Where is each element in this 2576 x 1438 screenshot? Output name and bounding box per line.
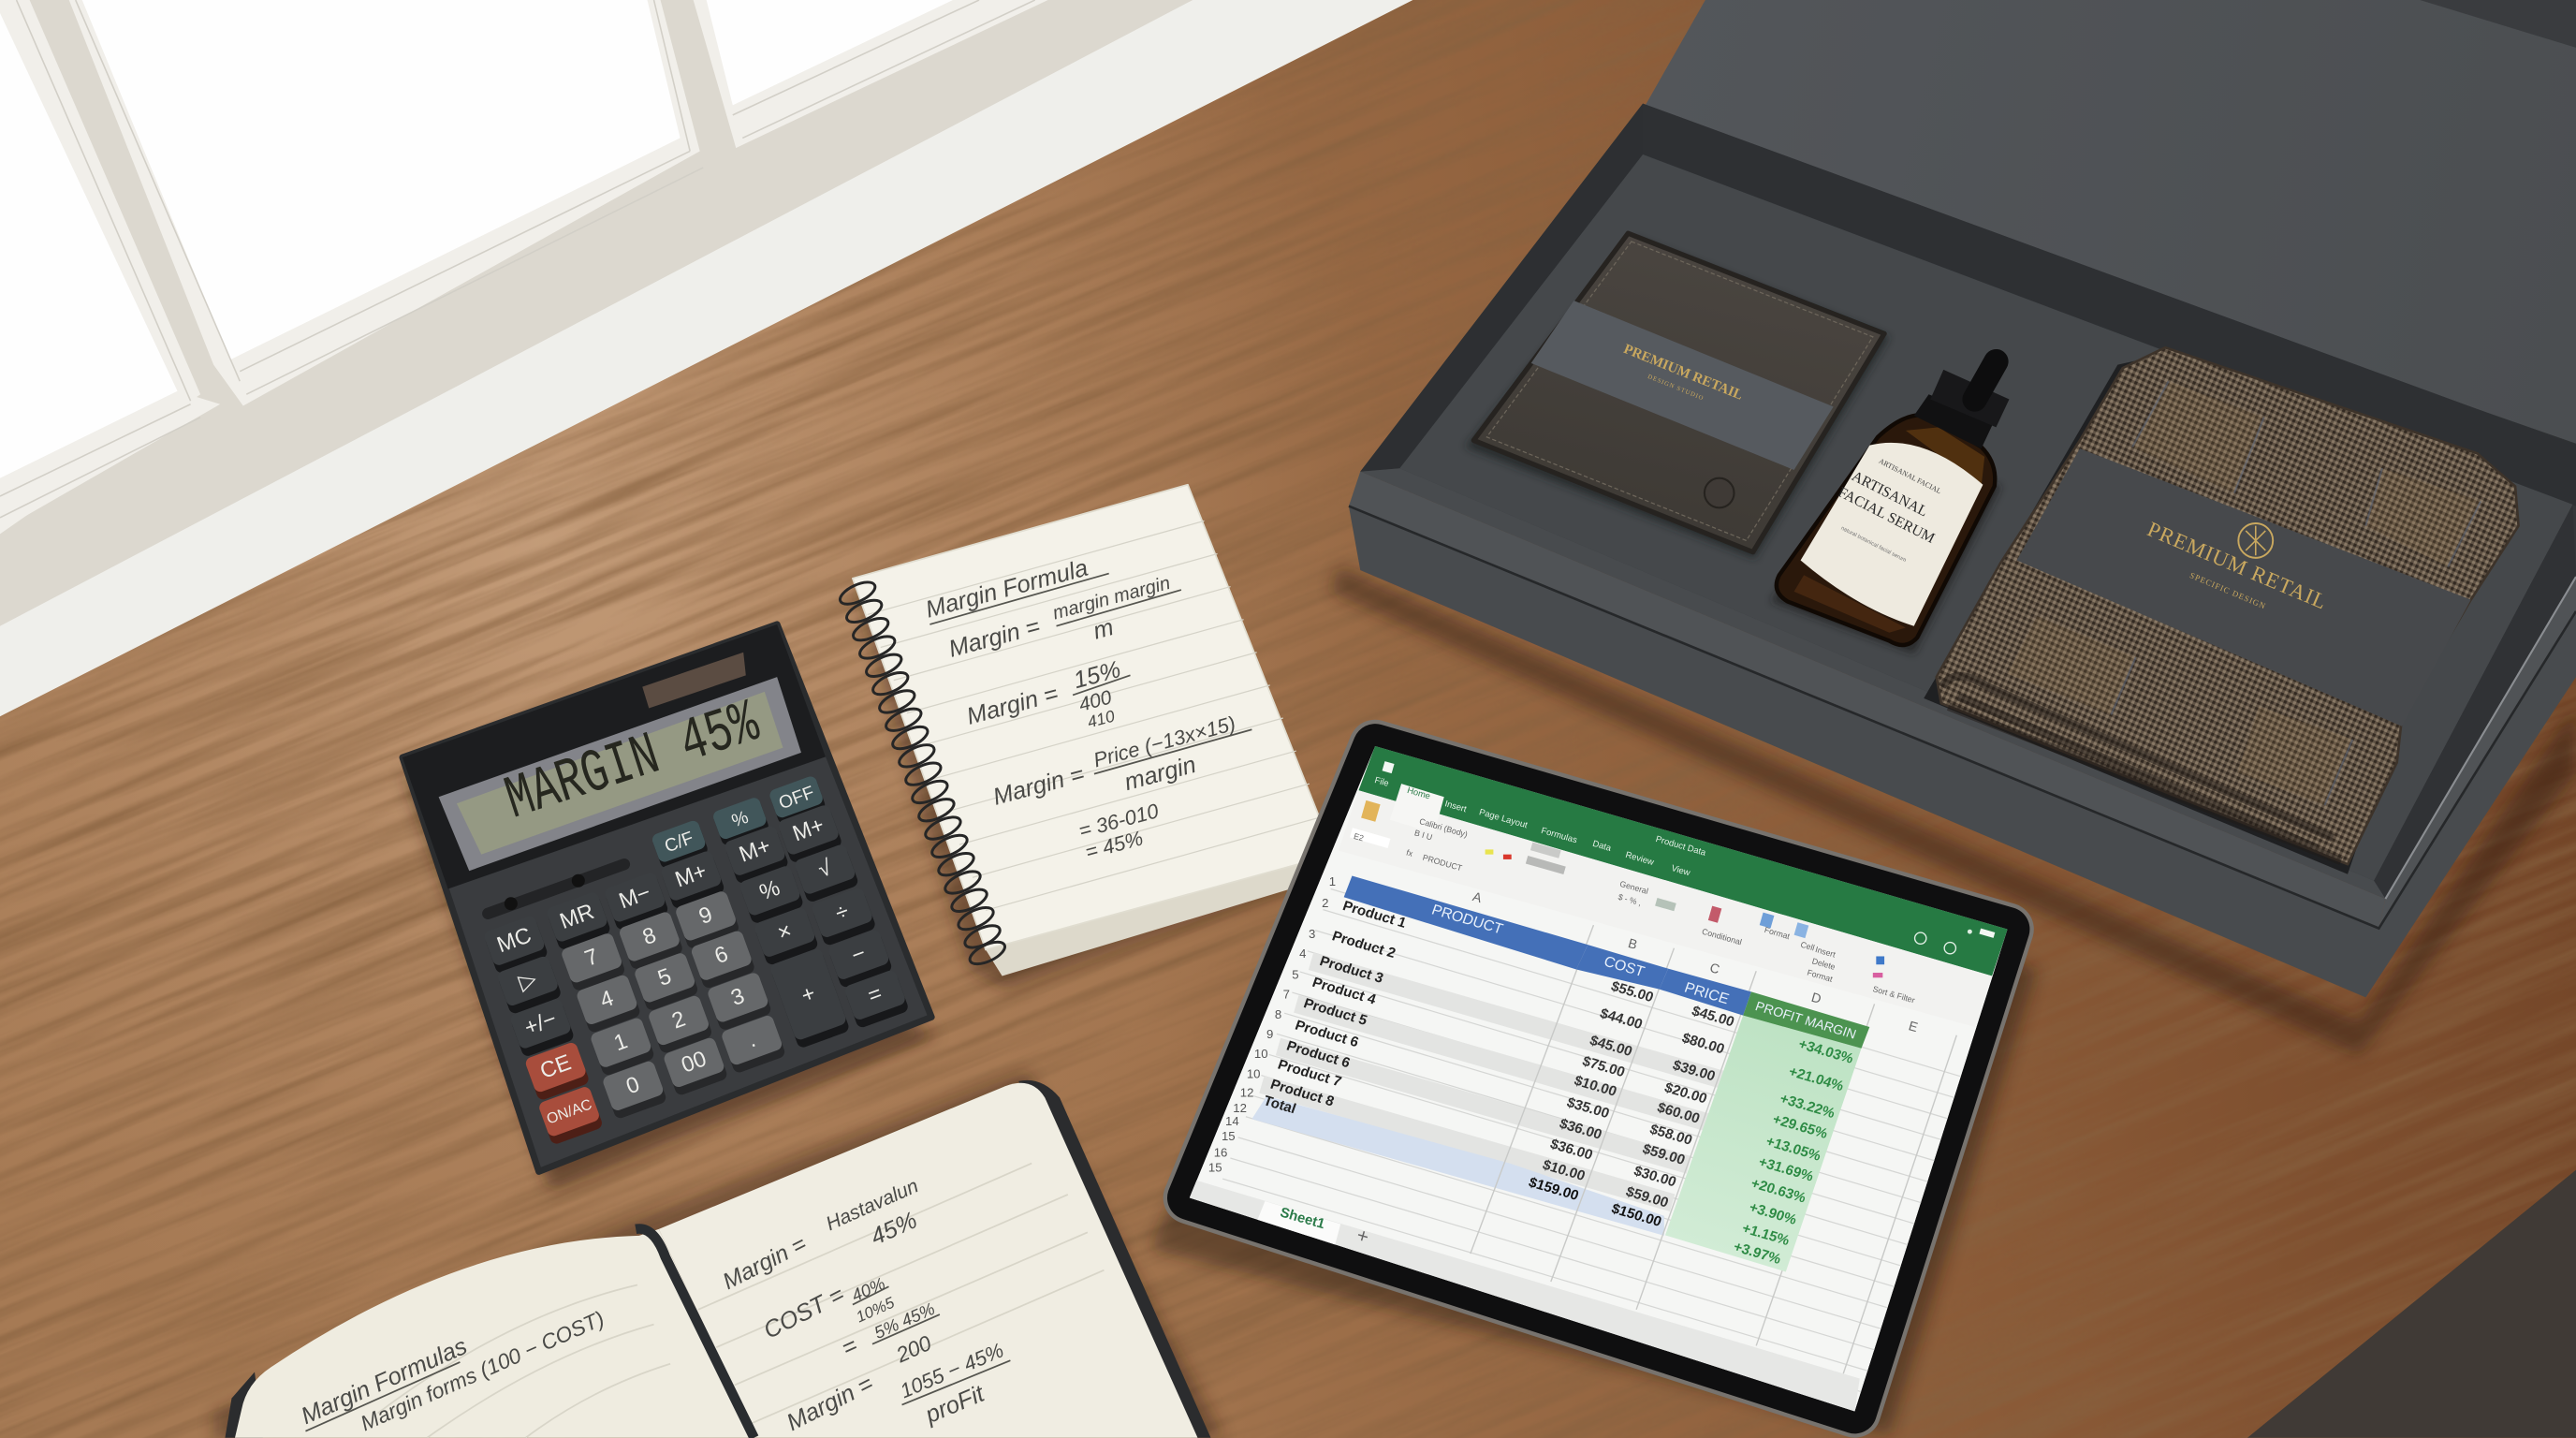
- left page handwriting: Margin Formulas: [298, 1333, 471, 1430]
- large pane: [82, 0, 681, 360]
- ribbon commands: Cell: [1799, 940, 1816, 953]
- window and sill: [0, 0, 1412, 716]
- key equals: [843, 969, 910, 1029]
- profit margin values: +34.03%: [1796, 1036, 1855, 1067]
- blue cost header: [1576, 945, 1668, 990]
- LCD screen: [457, 692, 783, 855]
- add sheet button: +: [1354, 1225, 1371, 1248]
- product names: Product 7: [1276, 1057, 1343, 1090]
- bottle body: [1777, 415, 1995, 645]
- handwritten formulas: Margin =: [946, 613, 1043, 663]
- spiral binding: [837, 578, 1008, 968]
- price values: $30.00: [1632, 1163, 1678, 1190]
- product names: Product 6: [1284, 1038, 1353, 1071]
- product names: Product 2: [1330, 929, 1398, 961]
- wallet stitching: [1486, 242, 1873, 540]
- right page handwriting: 10%5: [854, 1293, 898, 1326]
- price values: $39.00: [1671, 1057, 1718, 1084]
- key 6: 6: [711, 942, 731, 969]
- key percent top: %: [729, 808, 751, 831]
- back cover right edge: [1018, 1080, 1211, 1438]
- green margin header: [1743, 991, 1869, 1049]
- key ON/AC: [537, 1085, 604, 1146]
- key 0: 0: [623, 1072, 643, 1099]
- serum bottle: [1777, 361, 2009, 645]
- price values: $58.00: [1647, 1122, 1694, 1149]
- key decimal: [720, 1014, 786, 1074]
- handwritten formulas: = 45%: [1083, 826, 1146, 864]
- handwritten formulas: Margin =: [990, 761, 1087, 811]
- key plus-minus: [509, 997, 575, 1058]
- ribbon commands: Format: [1764, 925, 1792, 941]
- back cover left edge: [225, 1372, 263, 1438]
- key percent: %: [756, 876, 783, 905]
- key 9: 9: [695, 902, 716, 930]
- price values: $20.00: [1662, 1079, 1709, 1107]
- slider switches: [488, 864, 624, 914]
- calculator: [402, 624, 936, 1190]
- tablet casing: [1190, 746, 2008, 1412]
- ribbon commands: Sort & Filter: [1872, 984, 1916, 1005]
- ribbon commands: General: [1618, 879, 1649, 896]
- total row band: [1251, 1096, 1664, 1236]
- scarf paper band: [2017, 448, 2471, 726]
- right page handwriting: 200: [892, 1330, 935, 1368]
- tray outer faces: [1349, 468, 2576, 929]
- key minus: [827, 929, 893, 989]
- key 7: 7: [581, 945, 602, 972]
- header labels: PROFIT MARGIN: [1753, 998, 1858, 1042]
- cost values: $36.00: [1548, 1137, 1595, 1164]
- row numbers: 12: [1240, 1086, 1253, 1100]
- ribbon commands: Format: [1806, 968, 1834, 984]
- key 9: [674, 889, 740, 950]
- left page: [235, 1229, 757, 1438]
- band brand text: PREMIUM RETAIL: [2144, 517, 2331, 614]
- row numbers: 4: [1299, 946, 1306, 961]
- ribbon commands: $ - % ,: [1617, 892, 1643, 907]
- right page handwriting: [719, 1175, 1010, 1436]
- formula bar: PRODUCT: [1422, 853, 1464, 873]
- product names: [1262, 898, 1409, 1117]
- sheet tab label: Sheet1: [1279, 1205, 1326, 1232]
- ribbon commands: [1361, 800, 1916, 1005]
- row numbers: 8: [1275, 1007, 1281, 1021]
- key M+ a: M+: [790, 813, 827, 846]
- profit margin values: +1.15%: [1740, 1221, 1792, 1249]
- column letters: B: [1627, 935, 1639, 952]
- header labels: COST: [1602, 954, 1647, 980]
- floor beyond table: [2247, 1170, 2576, 1438]
- row numbers: 12: [1233, 1101, 1247, 1115]
- key MC: [483, 915, 549, 975]
- cost values: $10.00: [1541, 1157, 1588, 1184]
- ribbon panel: [1359, 790, 1992, 976]
- key 4: [576, 974, 641, 1034]
- product names: Product 3: [1318, 953, 1385, 987]
- handwritten formulas: m: [1090, 614, 1117, 645]
- wallet band small text: DESIGN STUDIO: [1647, 374, 1705, 403]
- gift box: [1331, 0, 2576, 1055]
- ribbon tabs: File: [1373, 775, 1390, 789]
- key OFF: [768, 774, 827, 826]
- column letters: [1471, 888, 1920, 1034]
- right page handwriting: 45%: [867, 1207, 921, 1251]
- handwritten formulas: = 36-010: [1076, 799, 1162, 843]
- calculator body: [402, 624, 931, 1171]
- glass highlight: [1906, 427, 1984, 487]
- key M-: M−: [616, 880, 654, 914]
- label subtitle: FACIAL SERUM: [1836, 484, 1938, 547]
- green title bar: [1358, 746, 2008, 976]
- alternating row shading: [1262, 961, 1721, 1203]
- profit margin values: +29.65%: [1770, 1111, 1830, 1142]
- ribbon commands: Calibri (Body): [1418, 816, 1469, 839]
- handwritten formulas: Margin Formula: [923, 555, 1090, 624]
- elastic band: [636, 1228, 754, 1438]
- profit margin values: +20.63%: [1749, 1176, 1808, 1206]
- cost values: $10.00: [1572, 1073, 1618, 1100]
- bottle shadow: [1771, 444, 2001, 654]
- left pane: [0, 13, 178, 478]
- key equals: =: [865, 981, 886, 1008]
- right page handwriting: proFit: [921, 1380, 988, 1429]
- label title: ARTISANAL: [1849, 468, 1930, 520]
- wallet shadow: [1466, 238, 1889, 559]
- tablet shadow: [1150, 753, 2037, 1434]
- row numbers: [1208, 874, 1336, 1174]
- key M-: [603, 871, 669, 932]
- scarf: [1937, 347, 2519, 864]
- column letters: A: [1471, 888, 1485, 905]
- right page handwriting: 1055 − 45%: [897, 1338, 1007, 1402]
- row numbers: 1: [1329, 874, 1336, 888]
- cost values: $35.00: [1565, 1094, 1611, 1122]
- plaid lines: [2111, 381, 2481, 805]
- ribbon tabs: Page Layout: [1478, 807, 1529, 830]
- key M+ a: [777, 803, 843, 864]
- product names: Total: [1262, 1093, 1298, 1117]
- row numbers: 9: [1266, 1027, 1273, 1041]
- lower dropper collar: [1914, 394, 1995, 448]
- calculator shadow: [402, 772, 936, 1190]
- column lines: [1471, 925, 1956, 1373]
- handwritten formulas: margin: [1121, 752, 1199, 796]
- label small title: ARTISANAL FACIAL: [1878, 457, 1943, 495]
- key 2: 2: [668, 1007, 689, 1034]
- right page handwriting: Hastavalun: [823, 1175, 922, 1235]
- row numbers: 16: [1214, 1146, 1227, 1160]
- ribbon commands: Delete: [1811, 956, 1837, 972]
- solar panel: [642, 653, 746, 708]
- ribbed dropper collar: [1930, 370, 2009, 427]
- handwritten formulas: margin margin: [1050, 573, 1173, 624]
- band small text: SPECIFIC DESIGN: [2188, 570, 2268, 611]
- bottle label: [1801, 443, 1983, 626]
- top page: [853, 485, 1334, 949]
- key 8: [618, 910, 684, 971]
- tray interior: [1360, 104, 2576, 899]
- title bar glyphs: [1383, 761, 1995, 954]
- right page handwriting: Margin =: [719, 1231, 811, 1295]
- key 6: [690, 930, 756, 990]
- page block: [986, 855, 1334, 976]
- ribbon tabs: [1373, 775, 1707, 878]
- key MR: [546, 890, 611, 951]
- left page handwriting: Margin forms (100 − COST): [357, 1306, 607, 1435]
- formula bar: [1350, 828, 1464, 873]
- product names: Product 5: [1301, 995, 1369, 1029]
- formula bar: E2: [1353, 831, 1365, 843]
- key M+ c: M+: [672, 859, 710, 893]
- page lines: [378, 1164, 1104, 1438]
- row numbers: 7: [1283, 987, 1290, 1001]
- key CE: [524, 1041, 590, 1101]
- formula bar: fx: [1405, 847, 1414, 858]
- key 00: [663, 1036, 728, 1096]
- row numbers: 15: [1208, 1160, 1222, 1174]
- wallet band brand text: PREMIUM RETAIL: [1621, 342, 1745, 404]
- right page handwriting: 40%: [848, 1273, 888, 1305]
- product names: Product 8: [1268, 1077, 1336, 1109]
- cost values: [1527, 978, 1656, 1204]
- row numbers: 3: [1309, 927, 1315, 941]
- spreadsheet screen: [1190, 746, 2021, 1412]
- ruled lines: [868, 521, 1323, 910]
- key percent: [739, 864, 804, 925]
- price values: $80.00: [1680, 1030, 1726, 1057]
- cost values: $45.00: [1588, 1033, 1634, 1060]
- price values: $59.00: [1624, 1184, 1671, 1211]
- sheet grid rows: [1222, 888, 1962, 1392]
- profit margin values: +3.97%: [1732, 1239, 1783, 1268]
- notebook shadow: [213, 1071, 1224, 1438]
- key 5: [633, 951, 699, 1012]
- product names: Product 4: [1310, 975, 1379, 1008]
- key MR: MR: [557, 900, 597, 934]
- key 3: 3: [728, 984, 748, 1011]
- blue product header: [1344, 875, 1588, 970]
- handwritten formulas: 15%: [1071, 656, 1123, 694]
- profit margin values: +3.90%: [1747, 1199, 1798, 1228]
- key OFF: OFF: [776, 783, 817, 814]
- ribbon commands: Conditional: [1701, 927, 1743, 946]
- row numbers: 10: [1254, 1047, 1268, 1061]
- product names: Product 6: [1293, 1018, 1361, 1050]
- display bezel: [439, 677, 801, 871]
- cost values: $36.00: [1558, 1116, 1604, 1143]
- right pane: [707, 0, 953, 105]
- scarf folds: [1942, 676, 2341, 861]
- calculator top band: [402, 624, 826, 889]
- key root: √: [815, 856, 835, 883]
- key 7: [560, 932, 626, 992]
- key minus: −: [848, 941, 869, 968]
- lower glass highlight: [1794, 575, 1906, 633]
- key divide: ÷: [832, 899, 852, 926]
- key plus: +: [798, 981, 819, 1008]
- right page handwriting: Margin =: [783, 1371, 878, 1436]
- wallet emblem: [1705, 478, 1734, 507]
- key 00: 00: [679, 1047, 710, 1078]
- ribbon commands: Insert: [1814, 945, 1837, 960]
- ribbon commands: B I U: [1413, 828, 1433, 842]
- right page handwriting: =: [838, 1332, 861, 1362]
- key 3: [707, 971, 772, 1032]
- key 8: 8: [639, 923, 660, 950]
- label fine print: natural botanical facial serum: [1839, 526, 1907, 564]
- key delete: [496, 955, 563, 1015]
- handwritten formulas: 400: [1076, 686, 1114, 716]
- row numbers: 14: [1225, 1114, 1239, 1128]
- wallet paper band: [1531, 301, 1834, 470]
- blue price header: [1660, 969, 1751, 1016]
- key multiply: [754, 906, 819, 966]
- key divide: [811, 887, 877, 946]
- row numbers: 10: [1247, 1066, 1260, 1080]
- handwritten formulas: Margin =: [964, 681, 1061, 730]
- handwritten formulas: Price (−13x×15): [1090, 712, 1238, 771]
- key root: [794, 844, 859, 903]
- recess shadow under scarf: [1924, 353, 2365, 874]
- key M+ c: [659, 850, 725, 910]
- ribbon tabs: Data: [1591, 839, 1613, 854]
- key decimal: .: [745, 1028, 759, 1052]
- key 2: [647, 994, 713, 1054]
- cost values: $159.00: [1527, 1175, 1581, 1204]
- tablet: [1150, 746, 2037, 1434]
- handwritten formulas: [923, 555, 1251, 864]
- home tab: [1396, 784, 1444, 814]
- dropper bulb: [1975, 361, 1996, 399]
- wallet: [1473, 233, 1884, 552]
- key delete: ▷: [516, 966, 541, 995]
- right page handwriting: 5% 45%: [871, 1299, 938, 1343]
- key MC: MC: [494, 923, 534, 958]
- band emblem: [2238, 523, 2273, 558]
- ribbon tabs: Product Data: [1654, 834, 1707, 858]
- row numbers: 5: [1292, 967, 1299, 981]
- active sheet tab: [1255, 1201, 1340, 1249]
- price values: $59.00: [1640, 1141, 1687, 1168]
- green margin column: [1665, 1016, 1862, 1271]
- window moulding: [0, 0, 1084, 534]
- key CE: CE: [537, 1050, 575, 1084]
- header labels: PRICE: [1682, 980, 1731, 1007]
- box base: [1349, 506, 2576, 997]
- row numbers: 15: [1222, 1129, 1236, 1143]
- open lid: [1638, 0, 2576, 446]
- column letters: D: [1809, 990, 1823, 1006]
- key multiply: ×: [774, 918, 795, 946]
- ribbon tabs: Formulas: [1540, 826, 1578, 845]
- right page: [659, 1083, 1197, 1438]
- ribbon tabs: View: [1670, 863, 1691, 878]
- open notebook: [213, 1071, 1224, 1438]
- price values: $45.00: [1690, 1003, 1736, 1030]
- profit margin values: +21.04%: [1787, 1064, 1846, 1094]
- profit margin values: +33.22%: [1778, 1091, 1837, 1122]
- column letters: C: [1708, 960, 1721, 976]
- price values: [1609, 1003, 1736, 1230]
- profit margin values: [1732, 1036, 1855, 1268]
- profit margin values: +13.05%: [1764, 1134, 1822, 1165]
- key 1: 1: [611, 1029, 631, 1056]
- spiral notebook: [837, 485, 1339, 990]
- key percent top: [711, 796, 770, 847]
- sheet tab bar: [1190, 1180, 1860, 1412]
- row numbers: 2: [1322, 896, 1329, 910]
- product names: Product 1: [1340, 898, 1409, 932]
- key C/F: [651, 819, 710, 870]
- tablet bezel: [1190, 746, 2008, 1412]
- key 0: [602, 1060, 667, 1120]
- tweed plaid patches: [2008, 381, 2481, 805]
- LCD readout: MARGIN 45%: [498, 689, 768, 835]
- key ON/AC: ON/AC: [545, 1096, 594, 1128]
- key C/F: C/F: [662, 829, 696, 857]
- cost values: $75.00: [1580, 1053, 1627, 1080]
- key 1: [590, 1017, 655, 1077]
- key M+ b: [724, 825, 789, 885]
- header labels: PRODUCT: [1429, 902, 1505, 938]
- ribbon tabs: Home: [1406, 785, 1431, 801]
- handwritten formulas: 410: [1085, 706, 1117, 731]
- profit margin values: +31.69%: [1756, 1154, 1816, 1185]
- key 5: 5: [655, 964, 675, 991]
- key plus: [769, 947, 850, 1049]
- box shadow on table: [1331, 567, 2576, 1055]
- cost values: $55.00: [1609, 978, 1656, 1005]
- key plus-minus: +/−: [521, 1006, 560, 1041]
- key M+ b: M+: [736, 834, 774, 868]
- header labels: [1429, 902, 1858, 1042]
- ribbon tabs: Insert: [1443, 799, 1468, 814]
- notebook shadow: [855, 585, 1339, 990]
- ribbon tabs: Review: [1624, 850, 1655, 868]
- right page handwriting: COST =: [759, 1282, 849, 1344]
- cost values: $44.00: [1598, 1005, 1645, 1033]
- key 4: 4: [597, 986, 617, 1013]
- price values: $60.00: [1655, 1100, 1702, 1127]
- column letters: E: [1907, 1018, 1920, 1034]
- price values: $150.00: [1609, 1201, 1663, 1230]
